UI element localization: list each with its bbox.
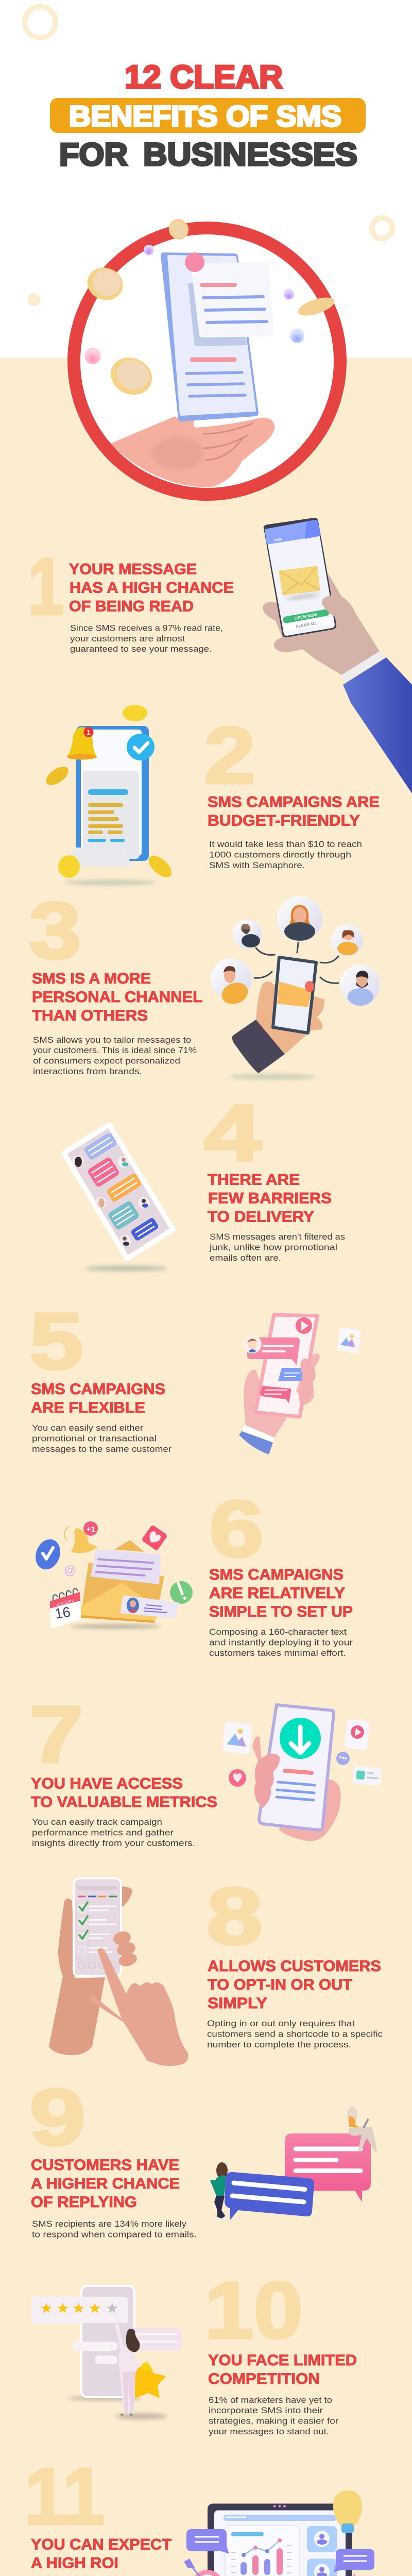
- body 1: your customers are almost: [70, 634, 185, 643]
- check badge: [127, 734, 154, 760]
- body 5: promotional or transactional: [32, 1433, 157, 1444]
- phone: [74, 1878, 121, 1976]
- envelope: [280, 567, 319, 595]
- heading 3: [32, 970, 202, 1024]
- section 4: [64, 1089, 345, 1271]
- title: FOR: [59, 137, 128, 173]
- number 4: 4: [204, 1089, 262, 1178]
- number 5: 5: [29, 1297, 83, 1386]
- section 2: [43, 705, 380, 885]
- decorative ring top left: [25, 7, 56, 38]
- chat bubbles: [186, 2529, 374, 2572]
- section 5: [29, 1297, 362, 1454]
- illustration: open envelope with icons: [31, 1521, 193, 1629]
- heading 10: YOU FACE LIMITED: [208, 2352, 357, 2369]
- warning badge: [170, 1581, 193, 1604]
- body 6: [209, 1627, 353, 1658]
- avatars: [72, 1156, 150, 1246]
- heading 2: SMS CAMPAIGNS ARE: [208, 793, 380, 811]
- body 9: [32, 2219, 197, 2239]
- heading 8: [208, 1958, 381, 2012]
- body 5: messages to the same customer: [32, 1444, 171, 1454]
- heading 9: [31, 2157, 180, 2211]
- body 1: guaranteed to see your message.: [70, 644, 212, 654]
- rating card: ★: [72, 2300, 85, 2317]
- heading 6: SMS CAMPAIGNS: [209, 1566, 344, 1583]
- plant: [342, 2573, 363, 2576]
- chart card: [225, 2526, 300, 2576]
- bell: [71, 1528, 98, 1553]
- heading 2: [208, 793, 380, 829]
- body 7: performance metrics and gather: [32, 1828, 174, 1837]
- heading 4: [208, 1172, 332, 1225]
- phone: [164, 256, 255, 418]
- title: BENEFITS OF SMS: [69, 100, 341, 133]
- illustration: hands tapping checklist on phone: [49, 1878, 188, 2066]
- body 5: You can easily send either: [32, 1423, 143, 1433]
- body 8: number to complete the process.: [207, 2040, 351, 2049]
- blue bubble: [225, 2172, 314, 2221]
- pink bubble: [285, 2133, 371, 2202]
- fingers: [254, 1754, 280, 1808]
- body 1: [70, 623, 223, 654]
- heading 1: HAS A HIGH CHANCE: [70, 579, 234, 597]
- rating card: ★: [40, 2300, 53, 2317]
- heart bubble: [141, 1524, 168, 1551]
- address bar: [224, 2515, 337, 2521]
- clear all button: [287, 621, 328, 628]
- illustration: hand holding phone: [263, 518, 412, 793]
- heading 5: SMS CAMPAIGNS: [31, 1381, 165, 1398]
- rating card: ★: [106, 2300, 119, 2317]
- body 3: [33, 1035, 197, 1076]
- body 3: of consumers expect personalized: [33, 1056, 180, 1065]
- heading 6: SIMPLE TO SET UP: [209, 1603, 353, 1620]
- floating balls: [84, 245, 304, 364]
- body 10: [209, 2395, 338, 2436]
- number 6: 6: [209, 1484, 264, 1574]
- phone: [273, 957, 316, 1033]
- hero illustration: hand holding phone inside red ring: [74, 215, 340, 495]
- coins: [83, 215, 337, 401]
- connectors: [254, 943, 338, 983]
- heading 5: [31, 1381, 165, 1416]
- heading 8: TO OPT-IN OR OUT: [208, 1976, 352, 1993]
- illustration: tablet dashboard: [184, 2490, 374, 2576]
- body 5: [32, 1423, 171, 1454]
- decorative ring right: [372, 218, 392, 239]
- tapping hand: [89, 1948, 188, 2066]
- fingers: [298, 1357, 318, 1405]
- avatar right: [340, 964, 380, 1006]
- section 3: [29, 886, 380, 1079]
- heading 7: TO VALUABLE METRICS: [31, 1794, 217, 1810]
- floating icons: [222, 1719, 382, 1787]
- at icon: @: [64, 1564, 76, 1578]
- avatar top right: [331, 924, 363, 956]
- body 3: interactions from brands.: [33, 1066, 142, 1076]
- illustration: hand holding phone with download icon: [222, 1705, 382, 1841]
- body 8: [207, 2019, 383, 2049]
- woman: [115, 2318, 153, 2415]
- calendar: AUGUST: [56, 1599, 74, 1607]
- bell: [67, 727, 97, 759]
- chat bubbles: [83, 1132, 159, 1242]
- hand: [256, 981, 324, 1054]
- illustration: hand holding pink phone: [239, 1315, 362, 1454]
- heading 9: A HIGHER CHANCE: [31, 2175, 180, 2192]
- body 4: [209, 1232, 345, 1263]
- woman sitting: [347, 2106, 377, 2152]
- heading 11: [31, 2536, 171, 2572]
- illustration: hand holding phone: OPEN NOW: [294, 612, 318, 621]
- decorative dot left: [28, 294, 40, 306]
- body 8: Opting in or out only requires that: [207, 2019, 355, 2028]
- rating card: ★: [88, 2300, 101, 2317]
- photo icon: [337, 1327, 362, 1354]
- body 2: 1000 customers directly through: [209, 850, 351, 859]
- heading 11: YOU CAN EXPECT: [31, 2536, 171, 2553]
- number 2: 2: [204, 711, 255, 801]
- section 11: [25, 2452, 374, 2576]
- heading 8: ALLOWS CUSTOMERS: [208, 1958, 381, 1975]
- heading 4: TO DELIVERY: [208, 1209, 314, 1225]
- rating card: [31, 2297, 128, 2323]
- section 9: [29, 2073, 377, 2239]
- body 4: emails often are.: [210, 1253, 281, 1263]
- fingers: [112, 1929, 138, 1968]
- heading 7: YOU HAVE ACCESS: [31, 1775, 183, 1792]
- hand: [110, 416, 275, 487]
- section 8: [49, 1872, 383, 2066]
- body 3: SMS allows you to tailor messages to: [33, 1035, 191, 1045]
- title: 12 CLEAR: [125, 59, 283, 95]
- heading 3: THAN OTHERS: [32, 1007, 148, 1024]
- body 10: 61% of marketers have yet to: [209, 2395, 332, 2405]
- avatar left: [211, 958, 252, 1008]
- body 2: [209, 839, 362, 870]
- heading 2: BUDGET-FRIENDLY: [208, 812, 360, 829]
- body 10: your messages to stand out.: [209, 2427, 329, 2436]
- message card: [185, 252, 271, 335]
- badge: [83, 727, 94, 737]
- play button: [296, 1317, 312, 1334]
- heading 6: ARE RELATIVELY: [209, 1585, 345, 1602]
- number 11: 11: [25, 2452, 105, 2541]
- body 9: SMS recipients are 134% more likely: [32, 2219, 187, 2229]
- illustration: chat bubbles with people: [210, 2106, 377, 2221]
- illustration: phone connected to people: [211, 896, 380, 1079]
- avatar top: [277, 896, 322, 941]
- heading 4: FEW BARRIERS: [208, 1190, 332, 1207]
- number 1: 1: [28, 542, 64, 632]
- envelope back: [81, 1540, 164, 1621]
- body 1: Since SMS receives a 97% read rate,: [70, 623, 223, 633]
- body 4: junk, unlike how promotional: [209, 1243, 337, 1252]
- avatar top left: [233, 920, 262, 948]
- heading 1: YOUR MESSAGE: [69, 561, 197, 578]
- avatar tiles: [307, 2526, 337, 2576]
- calendar: 16: [54, 1604, 72, 1622]
- title: BUSINESSES: [143, 137, 357, 173]
- body 7: [32, 1817, 195, 1848]
- body 6: customers takes minimal effort.: [209, 1648, 346, 1658]
- heading 1: [69, 561, 234, 615]
- number 7: 7: [29, 1690, 83, 1780]
- checklist: [78, 1902, 116, 1954]
- open now button: [286, 613, 326, 620]
- phone lines: [285, 1771, 312, 1773]
- heading 8: SIMPLY: [208, 1995, 267, 2012]
- sleeve: [232, 1020, 285, 1073]
- background: white header: [0, 0, 412, 358]
- body 6: Composing a 160-character text: [209, 1627, 347, 1637]
- coins: [123, 705, 147, 721]
- section 1: [28, 518, 412, 793]
- body 10: strategies, making it easier for: [209, 2416, 338, 2426]
- heading 1: OF BEING READ: [69, 598, 194, 615]
- section 10: [31, 2266, 357, 2436]
- body 7: You can easily track campaign: [32, 1817, 162, 1827]
- heading 5: ARE FLEXIBLE: [31, 1399, 145, 1416]
- heading 9: CUSTOMERS HAVE: [31, 2157, 179, 2174]
- profile card: [121, 1596, 179, 1617]
- body 3: your customers. This is ideal since 71%: [33, 1045, 197, 1055]
- illustration: rating on phone with woman: [31, 2286, 181, 2419]
- illustration: receipt on phone with coins and bell: 1: [87, 728, 91, 736]
- heading 3: SMS IS A MORE: [32, 970, 151, 987]
- checklist tabs: [78, 1896, 85, 1897]
- body 6: and instantly deploying it to your: [209, 1637, 353, 1648]
- number 3: 3: [29, 886, 81, 976]
- bottom icons: [78, 1962, 116, 1969]
- holding hand: [49, 1899, 105, 2055]
- target: [184, 2558, 224, 2576]
- body 9: to respond when compared to emails.: [32, 2230, 197, 2239]
- section 7: [29, 1690, 382, 1848]
- heading 11: A HIGH ROI: [31, 2554, 118, 2572]
- light bulb: [333, 2490, 362, 2533]
- body 2: SMS with Semaphore.: [209, 860, 305, 870]
- heading 10: COMPETITION: [208, 2370, 320, 2387]
- download circle: [280, 1718, 321, 1759]
- illustration: hand holding phone: CLEAR ALL: [296, 621, 318, 629]
- number 10: 10: [204, 2266, 303, 2355]
- chat bubbles: [247, 1337, 300, 1365]
- rating card: ★: [56, 2300, 70, 2317]
- number 8: 8: [207, 1872, 263, 1961]
- heading 6: [209, 1566, 353, 1620]
- title: [50, 59, 366, 173]
- heading 3: PERSONAL CHANNEL: [32, 989, 202, 1006]
- check badge: [31, 1536, 64, 1573]
- body 4: SMS messages aren't filtered as: [210, 1232, 345, 1242]
- illustration: hand holding phone: Mail: [274, 536, 282, 543]
- body 8: customers send a shortcode to a specific: [207, 2029, 383, 2039]
- illustration: receipt on phone with coins and bell: [43, 705, 175, 885]
- body 2: It would take less than $10 to reach: [209, 839, 362, 849]
- letter: [91, 1549, 161, 1584]
- illustration: tilted chat phone: [64, 1125, 173, 1271]
- calendar: [50, 1588, 81, 1629]
- heading 4: THERE ARE: [208, 1172, 300, 1188]
- heading 9: OF REPLYING: [31, 2194, 137, 2211]
- envelope front: [81, 1583, 161, 1621]
- small card: [131, 2328, 181, 2350]
- heading 10: [208, 2352, 357, 2387]
- big star: [135, 2363, 166, 2398]
- number 9: 9: [29, 2073, 85, 2162]
- woman standing: [210, 2162, 228, 2221]
- heading 7: [31, 1775, 217, 1810]
- body 7: insights directly from your customers.: [32, 1838, 195, 1848]
- section 6: [31, 1484, 353, 1658]
- illustration: open envelope with icons: +1: [86, 1525, 95, 1534]
- body 10: incorporate SMS into their: [209, 2405, 323, 2415]
- plus one badge: [83, 1521, 98, 1536]
